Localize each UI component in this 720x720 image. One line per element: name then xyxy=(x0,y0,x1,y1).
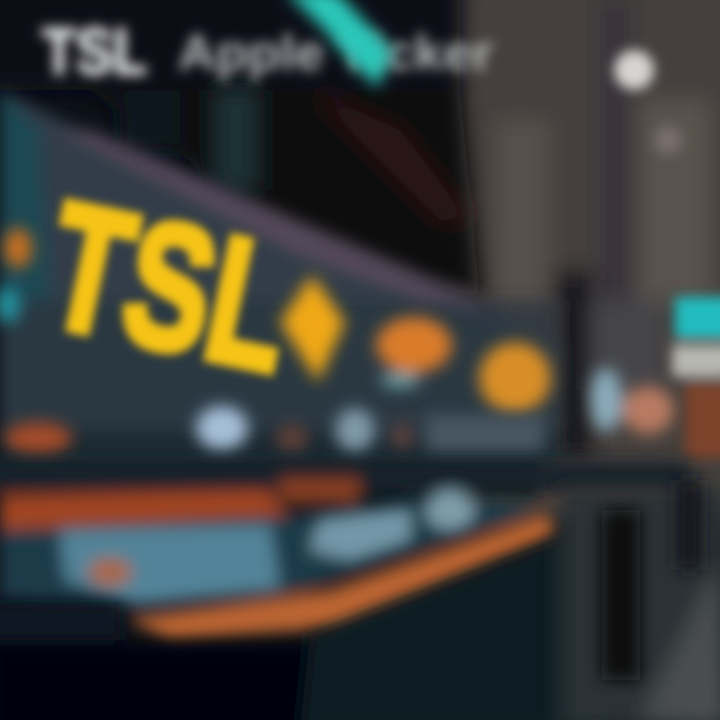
right side signage xyxy=(540,297,720,500)
background: right columns xyxy=(450,0,720,520)
sign: lower tiles xyxy=(4,368,674,454)
right foreground xyxy=(560,490,720,720)
sign: diamond and orange tickers xyxy=(0,228,551,414)
sign: TSL headline: TSL xyxy=(32,165,308,409)
heading text at top xyxy=(42,14,493,88)
sign band xyxy=(0,90,560,494)
teal logo at top xyxy=(285,0,392,88)
heading text at top: Apple Ticker xyxy=(178,25,493,81)
dark upper-left ceiling xyxy=(0,0,480,300)
counter xyxy=(0,462,690,640)
dark base of counter xyxy=(0,530,600,720)
heading text at top: TSL xyxy=(42,14,147,88)
ceiling lights xyxy=(614,50,682,154)
